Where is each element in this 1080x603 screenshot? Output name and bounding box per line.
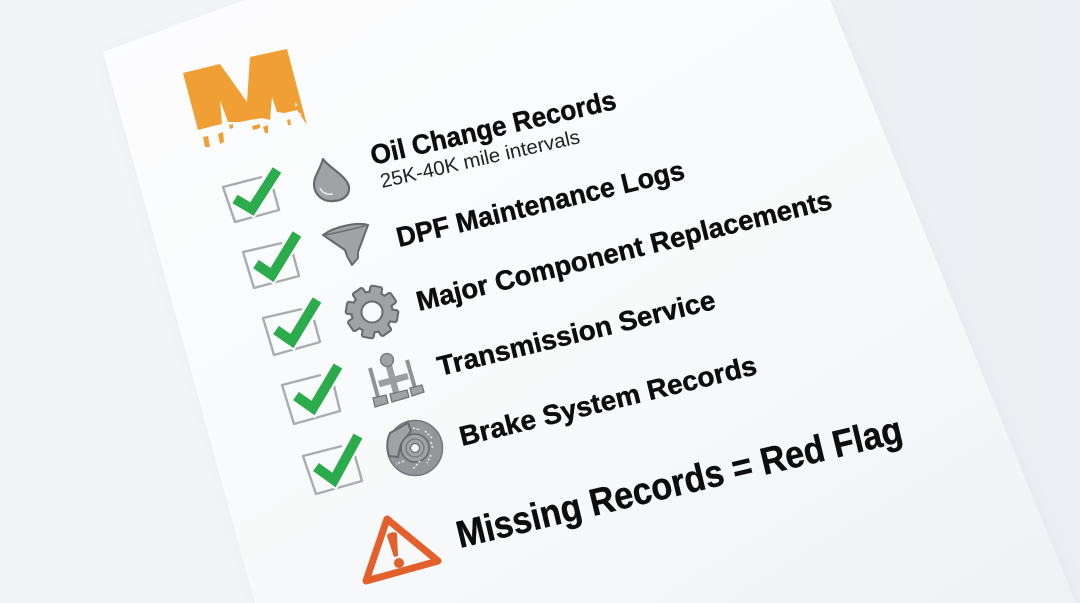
row 5 text: Brake System Records	[456, 349, 760, 452]
row 3 text: Major Component Replacements	[413, 184, 835, 317]
row 1 text: 25K-40K mile intervals	[378, 126, 582, 193]
row 4 text: Transmission Service	[434, 284, 718, 382]
icon: brake disc	[387, 420, 442, 476]
red flag warning text: Missing Records = Red Flag	[452, 409, 906, 557]
row 4 checkbox	[282, 366, 340, 424]
icon: gear shifter	[370, 354, 424, 407]
icon: oil drop	[314, 159, 349, 201]
logo: distressed orange M	[183, 49, 307, 147]
warning triangle icon	[366, 519, 438, 581]
row 2 text: DPF Maintenance Logs	[393, 154, 687, 253]
row 5 checkbox	[303, 436, 362, 494]
row 1 checkbox	[223, 170, 279, 222]
icon: gear	[345, 285, 399, 339]
row 3 checkbox	[263, 300, 320, 355]
row 2 checkbox	[243, 234, 299, 288]
row 1 text: Oil Change Records	[367, 84, 619, 171]
icon: funnel	[323, 224, 368, 265]
